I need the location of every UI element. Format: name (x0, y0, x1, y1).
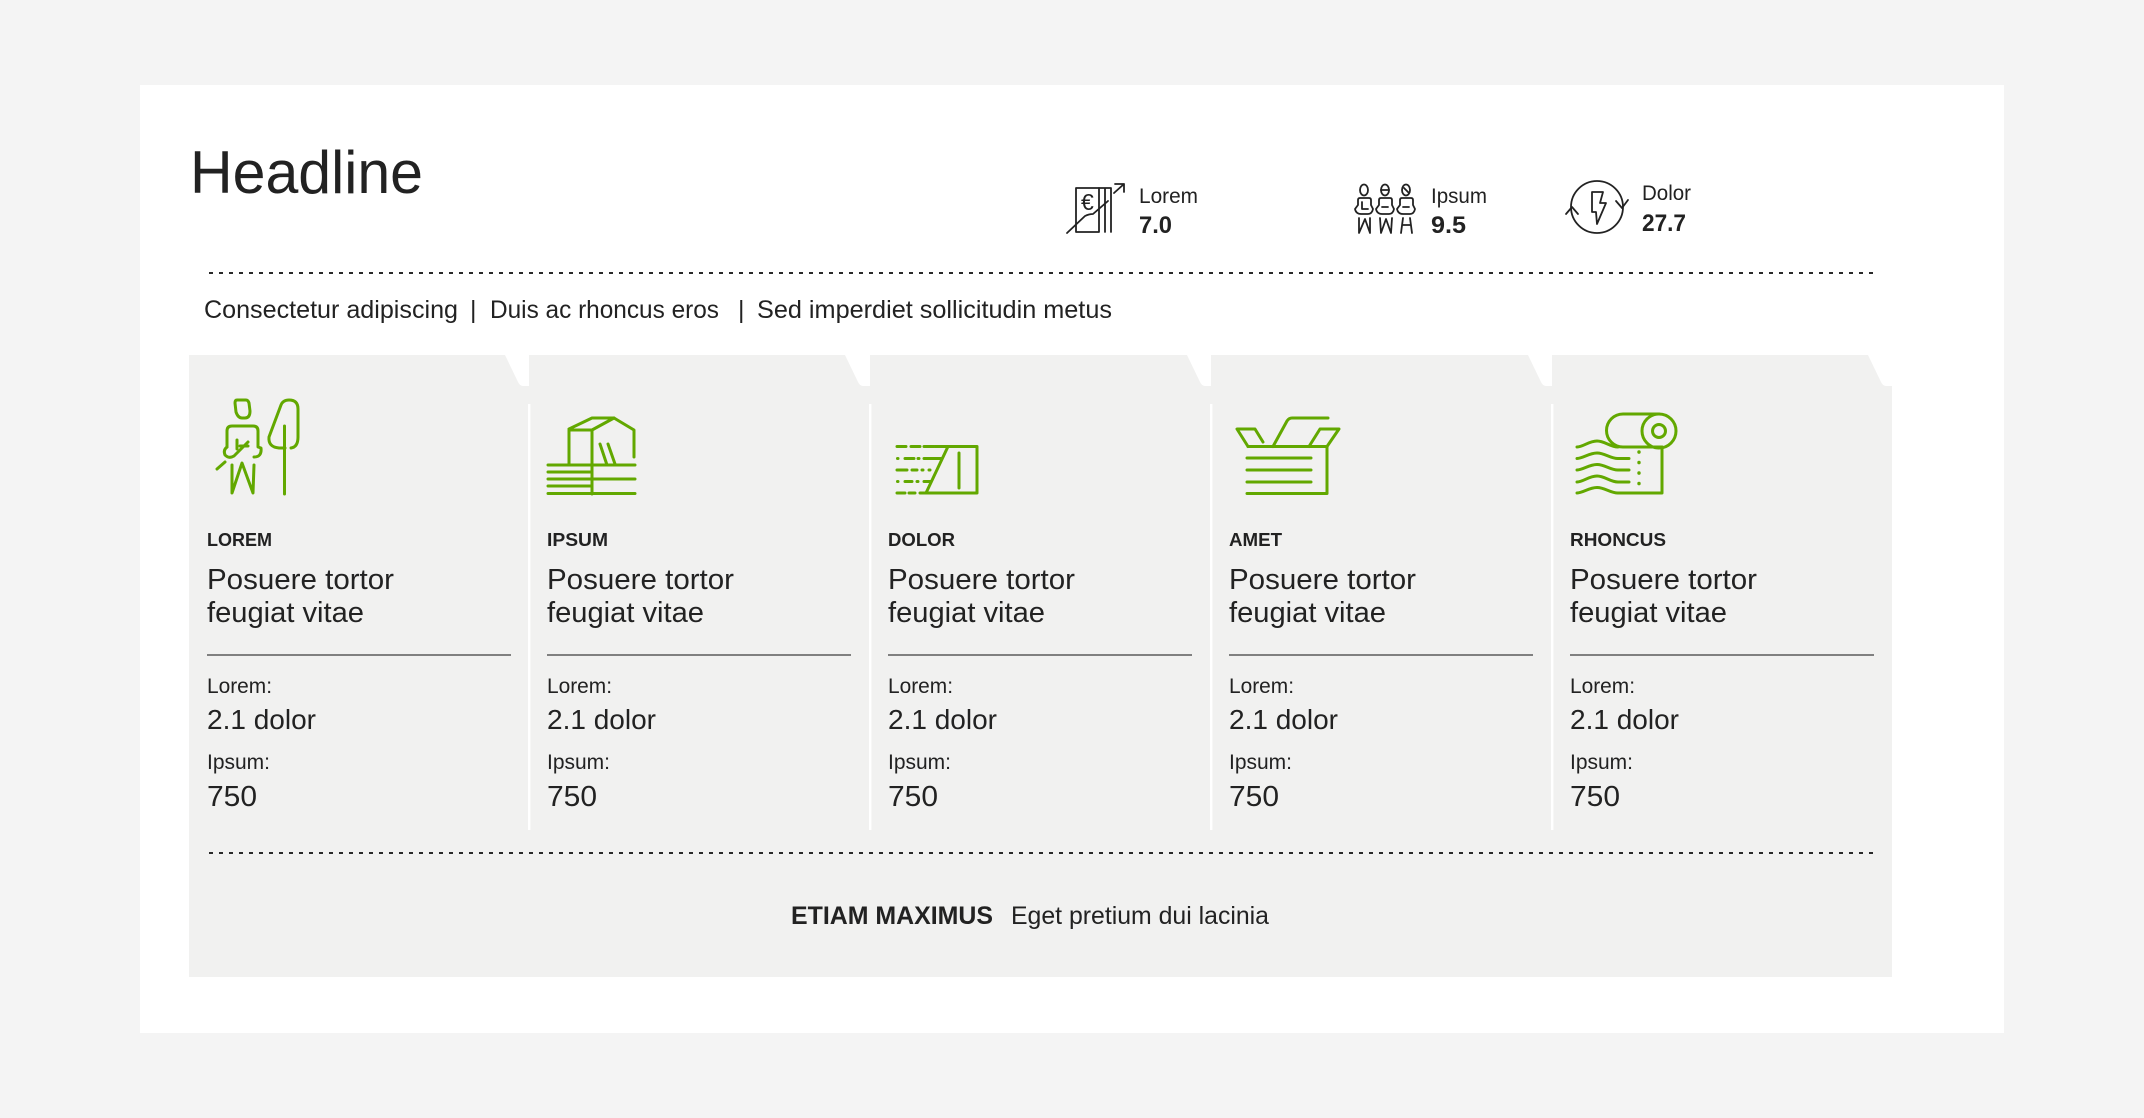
stat: Lorem 7.0: Lorem (1139, 185, 1198, 208)
icon: fading panel (897, 446, 977, 493)
column 3: Dolor: feugiat vitae (888, 597, 1045, 629)
column 3: Dolor: DOLOR (888, 530, 955, 550)
column 2: Ipsum: Ipsum: (547, 751, 610, 774)
column 1: Lorem: 750 (207, 781, 257, 813)
footer note (791, 902, 1269, 930)
icon: euro chart: € (1081, 189, 1094, 215)
column 4: Amet: Lorem: (1229, 675, 1294, 698)
column 5: Rhoncus: Ipsum: (1570, 751, 1633, 774)
column 3: Dolor: Ipsum: (888, 751, 951, 774)
column 3: Dolor: 2.1 dolor (888, 704, 997, 735)
subheading (204, 296, 1112, 324)
stat: Ipsum 9.5: Ipsum (1431, 185, 1487, 208)
subheading: Duis ac rhoncus eros (490, 296, 719, 324)
column 2: Ipsum: Posuere tortor (547, 564, 734, 596)
column 5: Rhoncus: Posuere tortor (1570, 564, 1757, 596)
icon: greenhouse on field (548, 418, 635, 494)
stat: Lorem 7.0 (1067, 184, 1198, 239)
icon: paper roll (1577, 414, 1676, 493)
column 4: Amet: 2.1 dolor (1229, 704, 1338, 735)
column 5: Rhoncus: feugiat vitae (1570, 597, 1727, 629)
column 1: Lorem: 2.1 dolor (207, 704, 316, 735)
column 2: Ipsum: feugiat vitae (547, 597, 704, 629)
column 5: Rhoncus: 2.1 dolor (1570, 704, 1679, 735)
column 5: Rhoncus: Lorem: (1570, 675, 1635, 698)
footer note: ETIAM MAXIMUS (791, 902, 993, 930)
column 2: Ipsum: 2.1 dolor (547, 704, 656, 735)
column 4: Amet: Ipsum: (1229, 751, 1292, 774)
subheading: Sed imperdiet sollicitudin metus (757, 296, 1112, 324)
column 4: Amet: feugiat vitae (1229, 597, 1386, 629)
footer note: Eget pretium dui lacinia (1011, 902, 1269, 930)
title: Headline (190, 139, 423, 206)
column 3: Dolor: Lorem: (888, 675, 953, 698)
column 4: Amet: Posuere tortor (1229, 564, 1416, 596)
column 1: Lorem: Ipsum: (207, 751, 270, 774)
column 4: Amet: AMET (1229, 530, 1282, 550)
tabbed grey panel (189, 355, 1892, 977)
stat: Dolor 27.7: Dolor (1642, 182, 1691, 205)
subheading: | (470, 296, 476, 324)
column 2: Ipsum: Lorem: (547, 675, 612, 698)
column 1: Lorem: Lorem: (207, 675, 272, 698)
column 3: Dolor: 750 (888, 781, 938, 813)
column 4: Amet (1229, 418, 1533, 813)
column 1: Lorem (207, 400, 511, 813)
column dividers (528, 404, 1553, 830)
column 2: Ipsum (547, 418, 851, 813)
column 1: Lorem: feugiat vitae (207, 597, 364, 629)
stat: Dolor 27.7 (1566, 181, 1691, 237)
column 5: Rhoncus: 750 (1570, 781, 1620, 813)
white card (140, 85, 2004, 1033)
column 3: Dolor: Posuere tortor (888, 564, 1075, 596)
icon: person and tree (217, 400, 298, 494)
stat: Ipsum 9.5: 9.5 (1431, 212, 1466, 239)
stat: Dolor 27.7: 27.7 (1642, 210, 1686, 237)
column 5: Rhoncus: RHONCUS (1570, 530, 1666, 550)
icon: three people (1355, 184, 1415, 233)
stat: Ipsum 9.5 (1355, 184, 1487, 239)
stat: Lorem 7.0: 7.0 (1139, 212, 1172, 239)
subheading: | (738, 296, 744, 324)
column 2: Ipsum: IPSUM (547, 530, 608, 550)
column 3: Dolor (888, 446, 1192, 813)
column 1: Lorem: Posuere tortor (207, 564, 394, 596)
column 2: Ipsum: 750 (547, 781, 597, 813)
column 5: Rhoncus (1570, 414, 1874, 813)
column 4: Amet: 750 (1229, 781, 1279, 813)
icon: energy cycle (1566, 181, 1628, 233)
column 1: Lorem: LOREM (207, 530, 272, 550)
icon: open box (1237, 418, 1339, 494)
subheading: Consectetur adipiscing (204, 296, 458, 324)
